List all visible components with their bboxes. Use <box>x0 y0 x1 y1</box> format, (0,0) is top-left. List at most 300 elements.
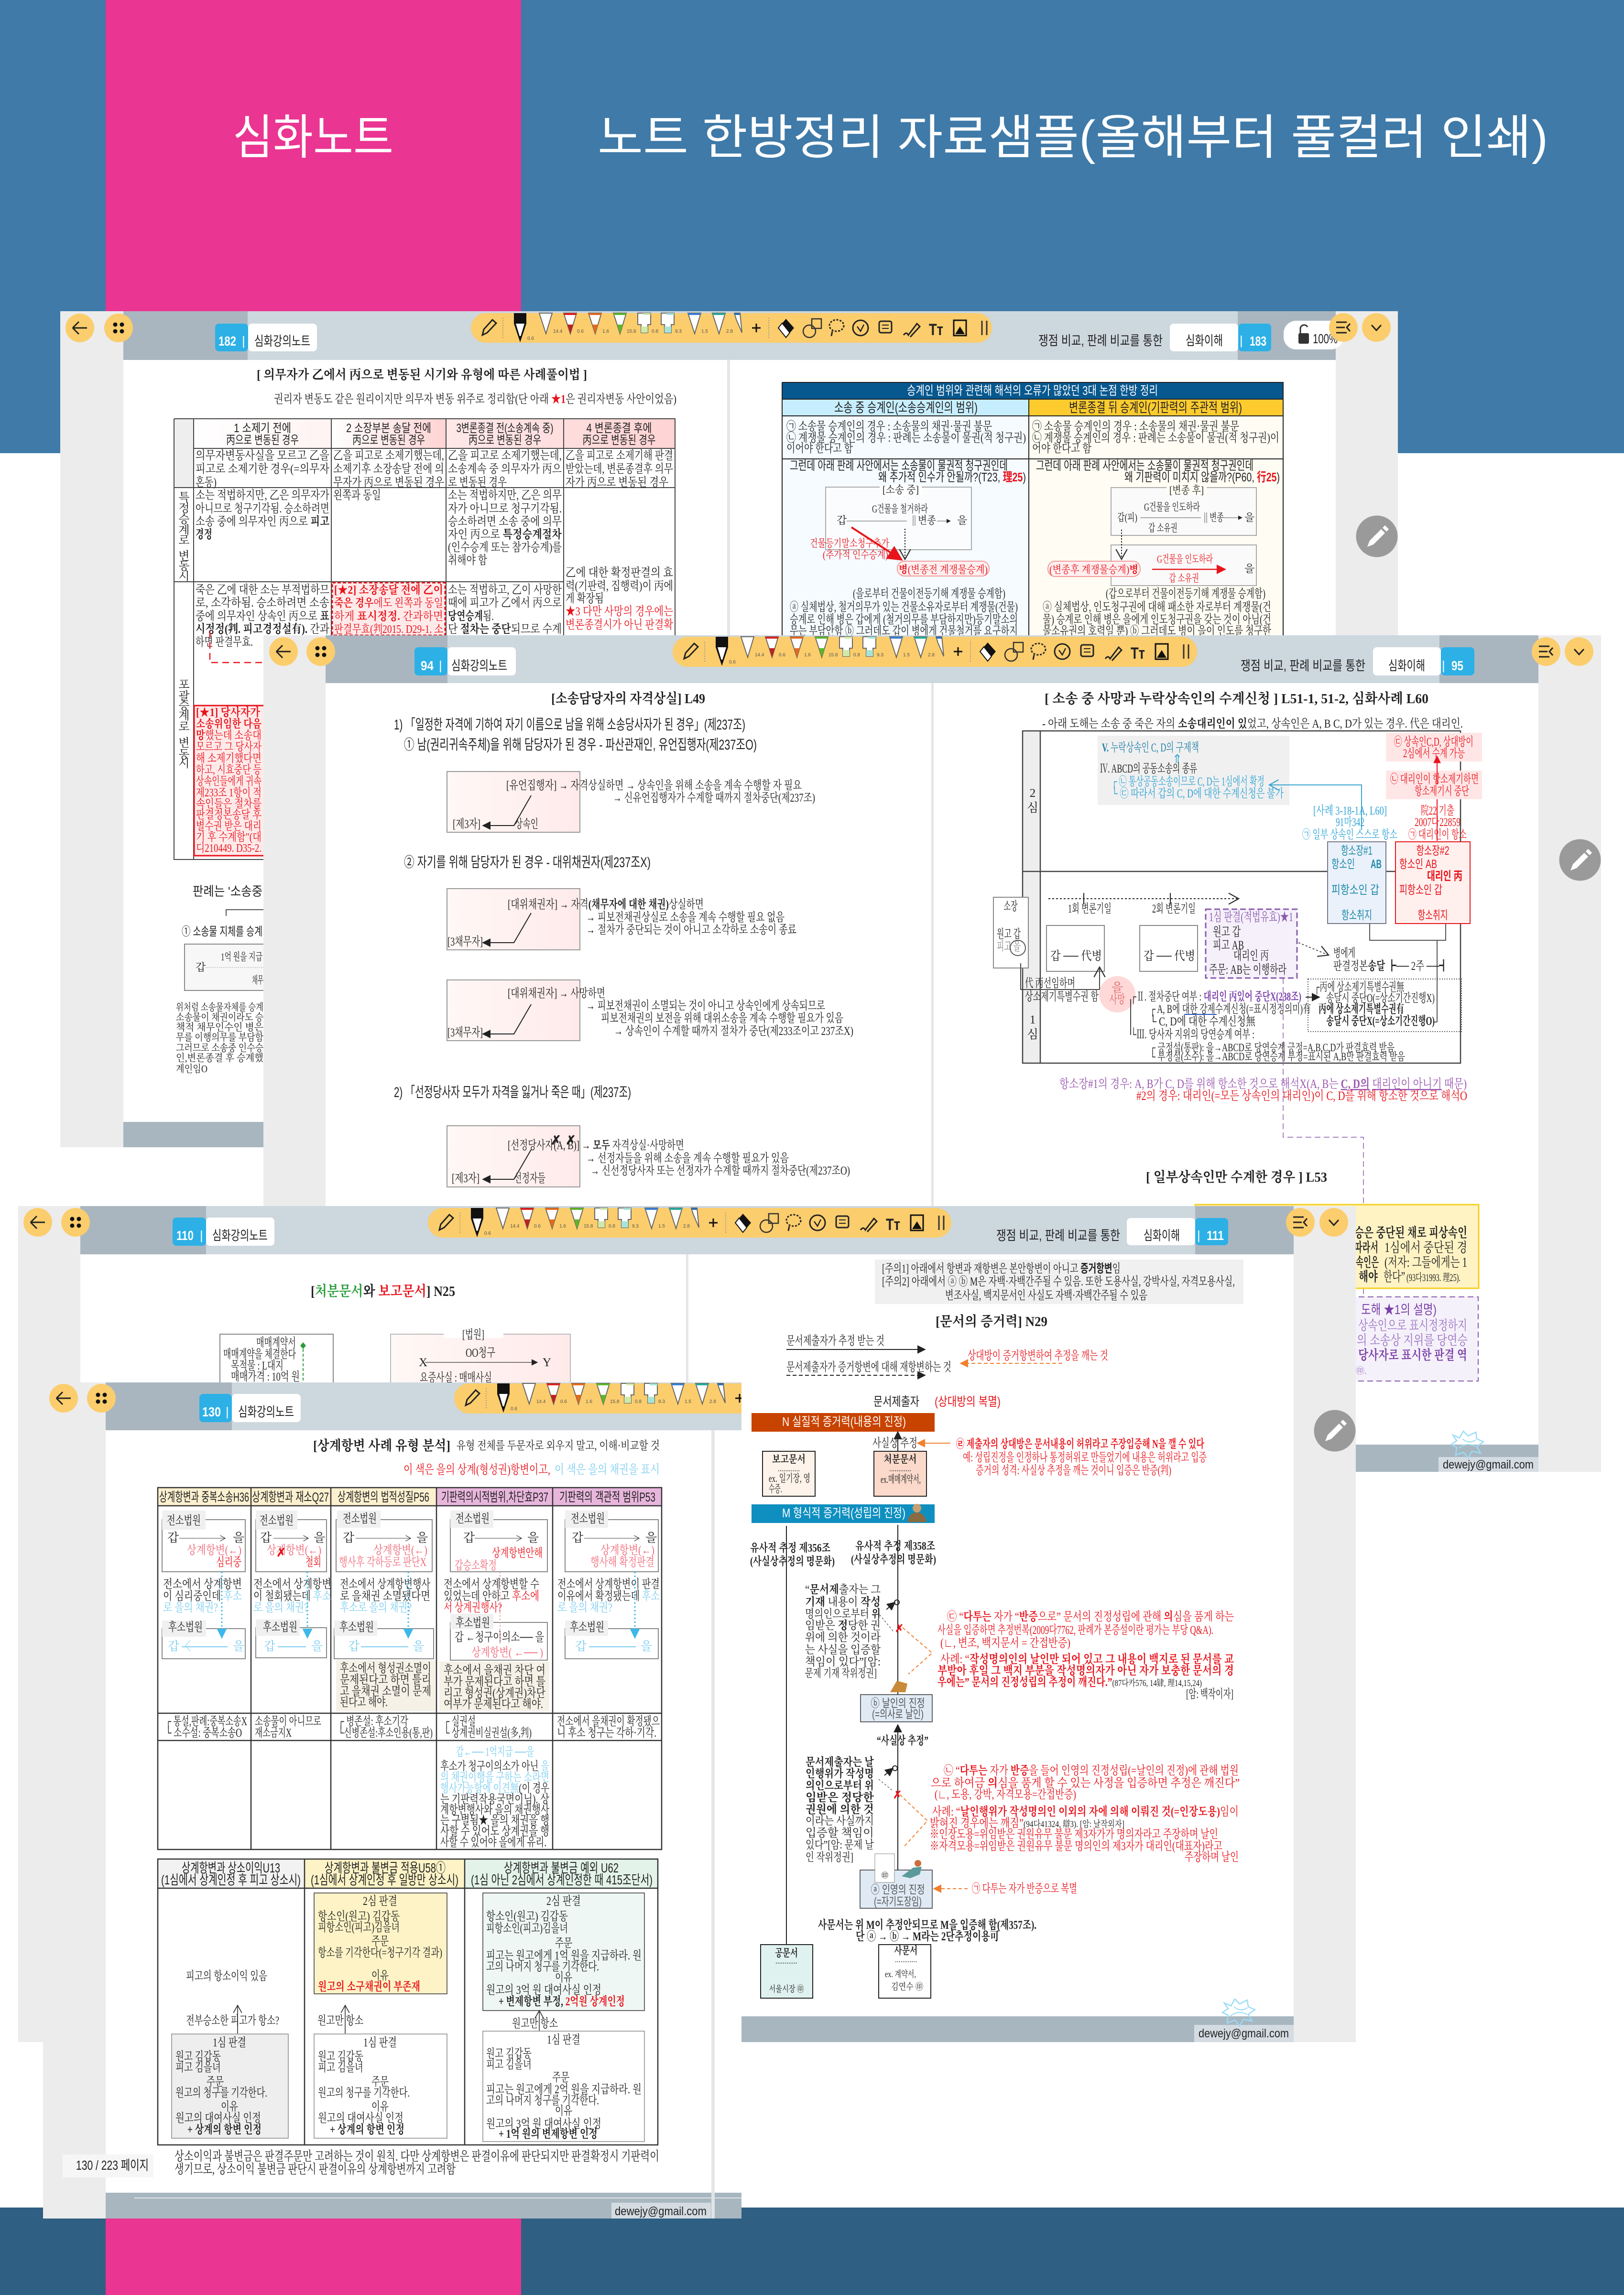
box: seal authenticity b: ⓑ 날인의 진정 <box>871 1697 925 1710</box>
text: execution objection note: 사할 수 있어도 상계권을 행 <box>440 1825 549 1838</box>
table: timing of obligor change: 3변론종결 전(소송계속 중) <box>456 422 554 435</box>
column 1: 상계항변(←) <box>187 1544 241 1557</box>
text: duty of proof a: 문서제출자는 날 <box>806 1756 874 1769</box>
text: execution objection note: 는 기판력작용국면이님). 상 <box>440 1793 550 1806</box>
text: execution objection note: 갑←── 1억지급 ──을 <box>456 1745 534 1759</box>
callout: purple explanation: 당사자로 표시한 판결 역 <box>1358 1348 1467 1363</box>
table: timing of obligor change: 죽은 乙에 대한 소는 부적법하므 <box>196 583 329 597</box>
table: timing of obligor change: ★3 다만 사망의 경우에는 <box>566 605 673 618</box>
diagram: appointed party: 선정자들 <box>514 1172 545 1185</box>
top pink column <box>106 0 521 453</box>
text: explanation right: ⓐ 실체법상, 인도청구권에 대해 패소한 자로부터 계쟁물(건 <box>1043 600 1271 614</box>
callout: yellow case law: 따라서 <box>1354 1240 1378 1255</box>
header bar: | <box>1197 1228 1200 1242</box>
row: theories: ┌ 통설,판례:중복소송X <box>165 1715 247 1729</box>
box: seal authenticity b: (=의사로 날인) <box>872 1708 924 1721</box>
diagram: after closing: 을 <box>1244 563 1254 575</box>
table: timing of obligor change: 취해야 함 <box>448 554 488 567</box>
table: timing of obligor change: 로 <box>178 534 190 547</box>
presumption marker a <box>879 1766 927 1846</box>
column 1: 후소법원 <box>168 1621 203 1634</box>
box: first instance judgment: 피고 AB <box>1213 938 1244 952</box>
column 2: 을 <box>314 1532 325 1545</box>
table: timing of obligor change: 력(기판력, 집행력)이 丙에 <box>566 579 673 593</box>
toolbar: 1.6 <box>586 1399 592 1404</box>
diagram: appointed party: ✗ <box>551 1133 561 1147</box>
toolbar <box>673 637 1197 667</box>
table: three issues: 어야 한다고 함 <box>1032 442 1092 455</box>
diagram: appeal flow: 병에게 <box>1333 946 1355 960</box>
header bar: 130 <box>202 1404 221 1419</box>
table: timing of obligor change: 때에 피고가 乙에서 丙으로 <box>448 596 562 609</box>
table: appeal interest: (1심에서 상계인정 후 피고 상소시) <box>161 1872 301 1887</box>
column 3: 을 <box>413 1640 424 1653</box>
table: three issues <box>782 382 1283 635</box>
table: timing of obligor change: 丙으로 변동된 경우 <box>582 434 656 447</box>
table: timing of obligor change: 무자가 丙으로 변동된 경우 <box>333 476 444 489</box>
text: execution objection note: 는 구별됨★ 을의 채권을 행 <box>440 1814 549 1827</box>
column 1: 〈 <box>179 1640 191 1653</box>
callout: purple explanation: ㊞. <box>1356 1366 1366 1376</box>
legend: estoppel lines <box>786 1334 1108 1375</box>
toolbar: Tт <box>886 1216 900 1234</box>
diagram: subrogation creditor: [대위채권자] → 자격(채무자에 대한 채권)상실하면 <box>508 898 704 911</box>
header bar: | <box>200 1228 203 1242</box>
diagram: appointed party: [제3자] <box>452 1172 480 1185</box>
box: court: Y <box>543 1356 551 1369</box>
legend: estoppel lines: 문서제출자가 증거항변에 대해 재항변하는 것 <box>786 1360 951 1374</box>
text: rebuttal c: 사실을 입증하면 추정번복(2009다7762, 판례가 본증설이란 평가는 부당 Q&A). <box>937 1623 1213 1637</box>
diagram: after closing: 변종 <box>1210 511 1224 523</box>
callout: yellow case law: 승은 중단된 채로 피상속인 <box>1354 1225 1467 1240</box>
table: timing of obligor change: 변 <box>178 550 190 563</box>
callout: yellow case law: 한다” <box>1384 1269 1405 1284</box>
column 4: 전소에서 상계항변할 수 <box>444 1577 539 1591</box>
diagram: after closing: 갑(피) <box>1117 511 1137 523</box>
box: report document: 수증. <box>769 1483 782 1495</box>
column 4: 후소에서 을채권 차단 여 <box>444 1664 545 1677</box>
column 4: 후소법원 <box>456 1616 490 1630</box>
text: rebuttal b: 사례: “날인행위가 작성명의인 이외의 자에 의해 이뤄진 것(=인장도용)임이 <box>932 1805 1239 1818</box>
presumption marker b: ✗ <box>895 1622 904 1634</box>
callout: purple explanation <box>1195 1297 1478 1381</box>
box: special authority: 송달시 중단X(=상소기간진행O) <box>1326 1014 1435 1028</box>
text: private documents note: 단 ⓐ → ⓑ → M라는 2단추정이용可 <box>856 1930 999 1943</box>
toolbar: 1.5 <box>658 1224 665 1229</box>
diagram: appeal flow: 2 <box>1030 787 1035 800</box>
box: complaint <box>993 897 1135 1012</box>
header bar: | <box>1442 658 1445 673</box>
column 2: 상계항변(←) <box>267 1544 321 1557</box>
column 5: 전소에서 상계항변이 판결 <box>557 1577 660 1591</box>
table: timing of obligor change: 피고로 소제기한 경우(=의무자 <box>196 462 330 476</box>
callout: star 2: 하게 표시정정. 간과하면 <box>334 610 443 623</box>
column 4: 갑 ←청구이의소── 을 <box>455 1631 544 1644</box>
toolbar: 9.3 <box>675 329 682 334</box>
text: explanation left: 무는 부담안함 ⓑ 그러데도 갑이 병에게 건물철거를 요구하지 <box>790 624 1018 638</box>
text: first instance issues: └ 부정설(소수): 을→ABCD로 당연승계 부정=표시된 A,B만 판결효력 받음 <box>1150 1050 1405 1063</box>
note box <box>875 1260 1243 1304</box>
callout: yellow case law: 속인은 <box>1356 1255 1379 1270</box>
column: disadvantage change: 이유 <box>371 1969 389 1982</box>
diagram: during suit: 건물등기말소청구추가 <box>810 537 890 549</box>
email tag: dewejy@gmail.com <box>615 2205 707 2218</box>
column 4: 을 <box>527 1532 539 1545</box>
text: case law note: 위처럼 소송물자체를 승계 <box>176 1001 263 1013</box>
table: timing of obligor change: 중에 의무자인 상속인 丙으로 표 <box>196 609 329 623</box>
toolbar: 0.6 <box>729 660 736 665</box>
table: three issues: ㉠ 소송물 승계인의 경우 : 소송물의 채권·물권 불문 <box>1032 420 1239 433</box>
diagram: subrogation creditor: → 피보전채권상실로 소송을 계속 수행할 필요 없음 <box>586 911 785 924</box>
text: case law note: 1억 원을 지급 <box>221 951 262 963</box>
box: first instance judgment: 주문: AB는 이행하라 <box>1209 963 1286 977</box>
callout: star 1: 소송위임한 다음 <box>196 718 262 730</box>
text: case law note: 계인임O <box>176 1063 207 1075</box>
box: appeal 2: 피항소인 갑 <box>1399 883 1442 897</box>
box: report document: ………… <box>778 1462 800 1474</box>
box: court: 요증사실 : 매매사실 <box>420 1371 492 1384</box>
column: disadvantage change: 원고만 항소 <box>317 2014 363 2027</box>
column: disadvantage change: 주문 <box>371 1935 389 1948</box>
column 4: 부가 문제된다고 하면 틀 <box>444 1675 545 1688</box>
header bar: 심화강의노트 <box>451 658 507 673</box>
nav buttons <box>65 313 1391 342</box>
callout: star 1: 판결정본송달 후 <box>196 808 262 821</box>
header bar: 심화강의노트 <box>212 1228 268 1243</box>
purple dashed connector <box>1283 978 1363 1305</box>
diagram: appeal flow <box>993 731 1482 1063</box>
row: theories: 전소에서 을채권이 확정됐으 <box>557 1715 660 1728</box>
text: rebuttal c: 우에는” 문서의 진정성립의 추정이 깨진다.”(87다카576, 14肄, 理14,15,24) <box>937 1675 1202 1689</box>
text: rebuttal c: (∟, 변조, 백지문서 = 간접반증) <box>940 1636 1070 1650</box>
text: analog presumption: 유사적 추정 제356조 <box>750 1542 830 1555</box>
column: exception: 피고는 원고에게 2억 원을 지급하라. 원 <box>486 2083 642 2096</box>
text: duty of proof a: 인 작위정권] <box>806 1851 853 1864</box>
table: three issues: 왜 추가적 인수가 안될까?(T23, 理25) <box>878 470 1026 484</box>
text: item 2: ② 자기를 위해 담당자가 된 경우 - 대위채권자(제237조X) <box>404 855 651 870</box>
table: three issues: 변론종결 뒤 승계인(기판력의 주관적 범위) <box>1069 400 1242 415</box>
row: theories: 재소금지X <box>255 1726 292 1740</box>
toolbar: 14.4 <box>755 653 764 658</box>
legend: estoppel lines: 상대방이 증거항변하여 추정을 깨는 것 <box>968 1349 1108 1362</box>
top blue band <box>0 0 1624 453</box>
timeline <box>1046 893 1239 971</box>
box: report document <box>763 1451 815 1496</box>
panel: spread 94-95 <box>263 635 1601 1472</box>
page counter pill: 130 / 223 페이지 <box>76 2158 149 2173</box>
box: appeal 1: 항소인 <box>1331 858 1355 871</box>
table: timing of obligor change: 승소하려면 소송 중에 의무 <box>448 515 562 528</box>
diagram: appointed party: [선정당사자(A, B)] → 모두 자격상실·사망하면 <box>508 1139 684 1152</box>
table: timing of obligor change: 게 확장됨 <box>566 592 604 605</box>
box: appeal 1: AB <box>1371 858 1382 871</box>
bar: N material evidence <box>752 1413 935 1432</box>
column: disadvantage change: 원고 김갑동 <box>318 2050 363 2063</box>
callout: yellow case law <box>1195 1205 1479 1288</box>
table: timing of obligor change: 혼동) <box>196 476 217 489</box>
text: first instance issues: └Ⅲ. 당사자 지위의 당연승계 여부 : <box>1131 1027 1254 1041</box>
diagram: creditor death: → 피보전채권이 소멸되는 것이 아니고 상속인에게 상속되므로 <box>586 999 825 1012</box>
note box: 변조사실, 백지문서인 사실도 자백·자백간주될 수 있음 <box>945 1289 1147 1302</box>
text: execution objection note: 후소가 청구이의소가 아닌 을 <box>440 1760 549 1773</box>
legend: colours: 이 색은 을의 채권을 표시 <box>555 1463 660 1477</box>
column 5: 갑 <box>575 1640 587 1653</box>
header bar <box>80 1206 1294 1254</box>
box: appeal 1 <box>1328 842 1386 924</box>
box: official document: 공문서 <box>775 1947 798 1959</box>
header bar: 쟁점 비교, 판례 비교를 통한 <box>1038 333 1163 348</box>
table: timing of obligor change: 2 소장부본 송달 전에 <box>346 422 431 435</box>
column: disadvantage change: 1심 판결 <box>363 2036 397 2049</box>
column 4: 리고 형성권(상계권)차단 <box>444 1686 546 1700</box>
icon: logo mark <box>1451 1431 1483 1458</box>
table: timing of obligor change: 시정정(判. 피고경정설有). 간과 <box>196 622 330 636</box>
text: duty of proof b: 기재 내용이 작성 <box>805 1596 881 1609</box>
column: exception: 이유 <box>555 1971 572 1984</box>
box: complaint: 을 <box>1112 981 1123 994</box>
column: exception: 피항소인(피고)김을녀 <box>486 1922 568 1935</box>
column: appeal interest: 이유 <box>221 2100 238 2113</box>
table: timing of obligor change: 4 변론종결 후에 <box>586 422 652 435</box>
column: exception: 원고만 항소 <box>512 2017 558 2030</box>
column 2: 후소법원 <box>263 1621 297 1634</box>
text: rebuttal b: ※인장도용=위임받은 권원유무 불문 제3자가가 명의자라고 주장하며 날인 <box>930 1827 1218 1841</box>
column: appeal interest: 원고의 대여사실 인정 <box>175 2111 261 2125</box>
text: section 2: 2) 「선정당사자 모두가 자격을 잃거나 죽은 때」(제237조) <box>394 1085 631 1100</box>
column: appeal interest: 피고 김을녀 <box>175 2061 221 2074</box>
table: three issues: 그런데 아래 판례 사안에서는 소송물이 물권적 청구권인데 <box>1036 458 1253 473</box>
text: case law note: 판례는 '소송중 <box>193 884 262 899</box>
box: disposition document: ………… <box>889 1462 911 1474</box>
column 1: 을 <box>233 1640 244 1653</box>
table: three issues: 승계인 범위와 관련해 해석의 오류가 많았던 3대 논점 한방 정리 <box>907 383 1158 398</box>
table: set-off defense types: 기판력의 객관적 범위P53 <box>559 1490 655 1504</box>
table: timing of obligor change: 변 <box>178 737 190 750</box>
toolbar: 2.8 <box>726 329 733 334</box>
box: complaint: 사망 <box>1109 993 1125 1006</box>
toolbar: 1.5 <box>903 653 910 658</box>
box: disposition document: ex.매매계약서, <box>881 1473 921 1485</box>
callout: star 2 <box>332 583 445 636</box>
column: exception: + 변제항변 부정, 2억원 상계인정 <box>499 1995 625 2008</box>
table: three issues: 이어야 한다고 함 <box>786 442 853 455</box>
text: rebuttal b: (∟, 도용, 강박, 자격모용=간접반증) <box>935 1788 1076 1801</box>
text: rebuttal c: ㉢ “다투는 자가 “반증으로” 문서의 진정성립에 관해 의심을 품게 하는 <box>947 1610 1234 1623</box>
diagram: after closing: [변종 후] <box>1169 484 1204 496</box>
table: timing of obligor change: 乙을 피고로 소제기했는데, <box>448 449 562 462</box>
icon: pencil button <box>1314 1410 1356 1451</box>
diagram: appeal flow: 심 <box>1027 1028 1038 1041</box>
title: section name: 심화노트 <box>233 111 393 164</box>
table: timing of obligor change: 소는 적법하지만, 乙은 의무 <box>448 489 562 502</box>
column 1: 전소에서 상계항변 <box>163 1577 242 1591</box>
table: timing of obligor change: 자인 丙으로 특정승계절차 <box>448 528 562 541</box>
text: first instance issues <box>1131 990 1405 1063</box>
text: rebuttal c: [암: 백작이자] <box>1186 1687 1233 1701</box>
column: exception <box>483 1893 644 2142</box>
text: first instance issues: ┌Ⅱ. 절차중단 여부 : 대리인 丙있어 중단X(238조) <box>1131 990 1301 1004</box>
diagram: executor: [유언집행자] → 자격상실하면 → 상속인을 위해 소송을 계속 수행할 자 필요 <box>506 779 802 792</box>
diagram: appointed party <box>447 1126 850 1187</box>
table: timing of obligor change: 乙을 피고로 소제기했는데, <box>333 449 444 462</box>
heading: disposition and report documents: [처분문서와 보고문서] N25 <box>311 1283 455 1299</box>
text: case law note: 인,변론종결 후 승계했 <box>176 1052 263 1064</box>
text: rebuttal: (상대방의 복멸) <box>935 1394 1001 1409</box>
text: duty of proof a: 인행위가 작성명 <box>806 1767 874 1780</box>
row: theories: 소송물이 아니므로 <box>255 1715 321 1728</box>
text: appeal note purple: 항소장#1의 경우: A, B가 C, D를 위해 항소한 것으로 해석X(A, B는 C, D의 대리인이 아니기 때문) <box>1059 1077 1467 1091</box>
text: rebuttal a: ㉠ 다투는 자가 반증으로 복멸 <box>972 1882 1077 1895</box>
box: court: [법원] <box>462 1328 484 1341</box>
panel: spread 182-183 <box>60 311 1398 1147</box>
table: timing of obligor change: 로 변동된 경우 <box>448 476 507 489</box>
text: analog presumption: 유사적 추정 제358조 <box>855 1540 935 1553</box>
presumption marker a: ✗ <box>893 1789 902 1801</box>
toolbar: 14.4 <box>553 329 563 334</box>
column: exception: 주문 <box>552 2071 569 2084</box>
column 2: ✗ <box>276 1547 286 1559</box>
diagram: appeal flow: ㉠ 일부 상속인 스스로 항소 <box>1302 828 1397 841</box>
callout: yellow case law: 해야 <box>1359 1269 1378 1284</box>
header bar: | <box>242 334 245 348</box>
box: report document: ex. 일기장, 영 <box>769 1472 810 1484</box>
table: timing of obligor change: (인수승계 또는 참가승계)를 <box>448 541 562 554</box>
heading: set-off defense analysis: 유형 전체를 두문자로 외우지 말고, 이해·비교할 것 <box>457 1439 660 1452</box>
text: duty of proof b: 문제 기재 작위정권] <box>805 1667 877 1680</box>
table: timing of obligor change: 소는 적법하지만, 乙은 의무자가 <box>196 489 330 502</box>
callout: yellow case law: (저자: 그들에게는 1 <box>1384 1255 1467 1270</box>
box: complaint: 소장 <box>1004 900 1018 913</box>
column 1: 을 <box>233 1532 244 1545</box>
column: exception: 피고 김을녀 <box>486 2058 532 2071</box>
box: seal impression a: ⓐ 인영의 진정 <box>871 1883 925 1896</box>
text: execution objection note: 사할 수 있어야 을에게 유리. <box>440 1836 546 1849</box>
bar: M formal evidence <box>752 1504 935 1523</box>
callout: star 1: 모르고 그 당사자 <box>196 740 262 753</box>
text: factual presumption: “사실상 추정” <box>877 1734 928 1747</box>
row: theories: └신병존설:후소인용(통,판) <box>338 1726 433 1740</box>
bar: N material evidence: N 실질적 증거력(내용의 진정) <box>782 1414 906 1429</box>
callout: red notes: ㉡ 대리인이 항소제기하면 <box>1390 772 1479 786</box>
header bar: 110 <box>176 1228 194 1243</box>
diagram: appointed party: → 신선정당사자 또는 선정자가 수계할 때까지 절차중단(제237조O) <box>590 1164 850 1177</box>
box: appeal 1: 피항소인 갑 <box>1331 883 1379 897</box>
column: disadvantage change: 항소를 기각한다(=청구기각 결과) <box>318 1946 442 1959</box>
header bar: 쟁점 비교, 판례 비교를 통한 <box>996 1228 1120 1243</box>
table: timing of obligor change: 시 <box>178 570 190 583</box>
column: exception: 원고의 3억 원 대여사실 인정 <box>486 2117 601 2131</box>
diagram: executor: [제3자] <box>453 817 480 831</box>
callout: star 1: 별수권 받은 대리 <box>196 820 262 833</box>
panel: remedies: V. 누락상속인 C, D의 구제책 <box>1102 741 1199 754</box>
column: disadvantage change <box>314 1893 447 2138</box>
box: private document <box>879 1945 931 1998</box>
panel: remedies: └ ㉢ 따라서 갑의 C, D에 대한 수계신청은 불가 <box>1112 786 1284 800</box>
email tag <box>1194 2025 1294 2042</box>
flow: factual presumption: 예: 성립진정을 인정하나 통정허위로 만들었기에 내용은 허위라고 입증 <box>963 1451 1207 1464</box>
diagram: after closing: (변종후 계쟁물승계)병 <box>1049 564 1138 576</box>
column 3: 상계항변(←) <box>373 1544 427 1557</box>
text: duty of proof b: 임받은 정당한 권 <box>805 1619 881 1632</box>
box: complaint: 代 丙선임하며 <box>1025 977 1075 990</box>
table: timing of obligor change: 특 <box>178 491 190 504</box>
table: timing of obligor change: 소송 중에 의무자인 丙으로 피고 <box>196 515 329 528</box>
column: appeal interest: 1심 판결 <box>213 2036 246 2049</box>
bottom bar <box>123 1122 1336 1147</box>
table: appeal interest: 상계항변과 불변금 예외 U62 <box>504 1860 619 1875</box>
table: timing of obligor change: 단 절차는 중단되므로 수계 <box>448 622 562 636</box>
text: duty of proof a: 임받은 정당한 <box>806 1791 874 1804</box>
column 5: 행사해 확정판결 <box>590 1555 654 1569</box>
table: appeal interest: (1심 아닌 2심에서 상계인정한 때 415조단서) <box>471 1872 653 1887</box>
table: timing of obligor change: 동 <box>178 749 190 761</box>
box: complaint: 피고 을 <box>997 940 1021 953</box>
column 3: 고 을채권 소멸이 문제 <box>340 1685 431 1698</box>
toolbar: 15.8 <box>610 1399 620 1404</box>
box: court: X <box>419 1356 427 1369</box>
table: timing of obligor change: 정 <box>178 502 190 515</box>
diagram: appointed party: → 선정자들을 위해 소송을 계속 수행할 필요가 있음 <box>586 1152 789 1165</box>
diagram: appeal flow: 1 <box>1030 1013 1035 1026</box>
text: explanation right: (갑으로부터 건물이전등기해 계쟁물 승계함) <box>1106 587 1265 600</box>
box: complaint: 원고 갑 <box>997 927 1021 941</box>
diagram: during suit: [소송 중] <box>883 484 919 496</box>
text: case law note: ① 소송물 지체를 승계 <box>182 925 262 938</box>
diagram: appointed party: ✗ <box>566 1133 576 1147</box>
diagram: subrogation creditor: [3채무자] <box>447 935 483 948</box>
text: first instance issues: ┌ A, B에 대한 강제수계신청(=표시정정의미)有 <box>1150 1002 1311 1017</box>
text: footnote <box>174 2149 659 2176</box>
column 2: 철회 <box>305 1555 321 1569</box>
box: appeal 1: 항소장#1 <box>1341 844 1373 858</box>
box: seal authenticity b <box>861 1681 932 1722</box>
table: timing of obligor change: 소제기후 소장송달 전에 의 <box>333 462 444 476</box>
header bar <box>106 1382 741 1430</box>
toolbar: Tт <box>929 321 943 339</box>
callout: star 1: 망했는데 소송대 <box>196 729 262 742</box>
column: disadvantage change: 피항소인(피고)김을녀 <box>318 1921 400 1934</box>
panel: page 130 <box>43 1382 978 2219</box>
box: appeal 2 <box>1395 842 1470 924</box>
column 4: 상계항변안해 <box>492 1546 543 1560</box>
text: explanation left <box>790 587 1018 638</box>
nav buttons <box>49 1384 116 1413</box>
callout: star 1: 해 소제기했다면 <box>196 752 262 765</box>
callout: star 1: 하고, 시효중단 등 <box>196 763 262 776</box>
lock pill <box>1284 321 1343 349</box>
column 4 <box>444 1511 547 1711</box>
diagram: after closing: G건물을 인도하라 <box>1144 501 1200 513</box>
text: analog presumption: (사실상추정의 명문화) <box>750 1555 835 1568</box>
text: first instance issues: └ C, D에 대한 수계신청無 <box>1150 1014 1256 1028</box>
column 3: 후소법원 <box>339 1621 374 1634</box>
header bar: 심화강의노트 <box>254 334 310 348</box>
box: private document: 사문서 <box>894 1945 918 1957</box>
text: section 1: 1) 「일정한 자격에 기하여 자기 이름으로 남을 위해 소송당사자가 된 경우」(제237조) <box>394 717 745 733</box>
table: timing of obligor change: 丙으로 변동된 경우 <box>352 434 425 447</box>
callout: star 1: [★1] 당사자가 <box>196 706 261 719</box>
column 3: 을 <box>416 1532 428 1545</box>
box: appeal 2: 항소장#2 <box>1416 844 1450 858</box>
header bar: 182 <box>218 334 236 348</box>
text: rebuttal c <box>937 1610 1234 1701</box>
text: explanation left: ⓐ 실체법상, 철거의무가 있는 건물소유자로부터 계쟁물(건물) <box>790 600 1018 614</box>
callout: red notes: ㉢ 상속인C,D, 상대방이 <box>1394 735 1473 749</box>
text: rebuttal c: 부받아 후일 그 백지 부분을 작성명의자가 아닌 자가 보충한 문서의 경 <box>937 1664 1234 1677</box>
timeline: 갑 ── 代병 <box>1050 949 1102 963</box>
toolbar: 0.8 <box>652 329 658 334</box>
red dashed connector <box>210 631 263 663</box>
